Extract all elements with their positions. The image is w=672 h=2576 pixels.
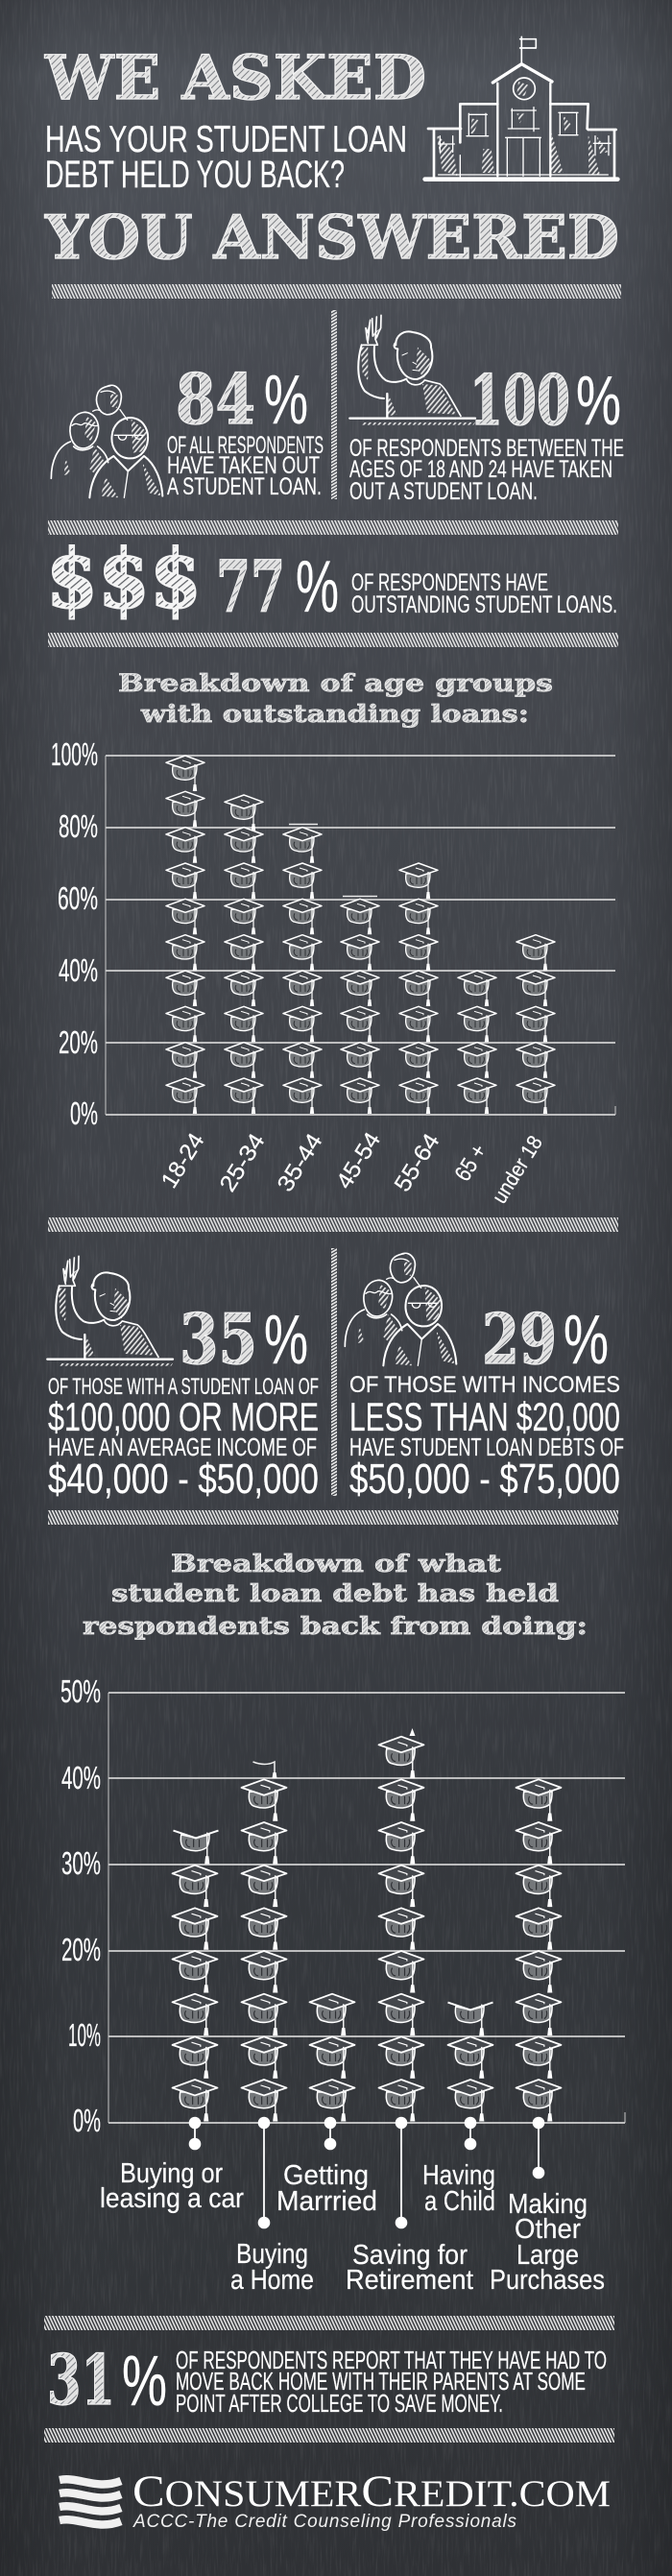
text: ages 18 to 24: OUT A STUDENT LOAN. — [349, 478, 538, 505]
panel: 84 percent — [51, 358, 324, 500]
heading: age groups: with outstanding loans: — [140, 700, 529, 728]
column: 35-44 — [283, 824, 322, 1114]
y axis labels: 20% — [61, 1932, 101, 1967]
stat: 100%: 100 — [469, 359, 570, 441]
text: loan and income: OF THOSE WITH A STUDENT LOAN OF — [48, 1374, 319, 1400]
category labels: Saving for — [352, 2240, 468, 2271]
wordmark: CONSUMER CREDIT.COM — [132, 2467, 611, 2516]
title: you answered: YOU ANSWERED — [44, 202, 619, 273]
text: outstanding loans — [351, 569, 617, 618]
x axis labels — [156, 1128, 547, 1208]
x axis labels: 45-54 — [331, 1128, 386, 1193]
x axis labels: 55-64 — [390, 1129, 445, 1196]
tagline: ACCC-The Credit Counseling Professionals — [132, 2512, 516, 2532]
subtitle question — [45, 119, 407, 196]
column: under 18 — [516, 935, 555, 1114]
text: loan and income: HAVE AN AVERAGE INCOME OF — [48, 1432, 317, 1461]
chart: what debt held respondents back from — [60, 1673, 625, 2296]
column: having a child — [447, 2003, 493, 2121]
heading: age groups — [118, 669, 553, 728]
text: all respondents: HAVE TAKEN OUT — [167, 452, 320, 479]
column: buying a home — [242, 1762, 286, 2121]
text: loan and income: $40,000 - $50,000 — [48, 1456, 319, 1503]
icon: school building — [425, 36, 617, 180]
stat: 77%: 77 — [216, 546, 285, 629]
category labels: Large — [516, 2240, 579, 2271]
stat: 31%: 31 — [47, 2339, 115, 2420]
icon: waves — [60, 2479, 121, 2525]
stat: 31%: % — [122, 2341, 167, 2420]
category labels: Making — [508, 2189, 588, 2220]
y axis labels: 40% — [61, 1760, 101, 1795]
stat: 84%: 84 — [176, 358, 255, 440]
text: outstanding loans: OF RESPONDENTS HAVE — [351, 569, 548, 596]
stat: 100%: % — [576, 363, 621, 440]
text: all respondents: OF ALL RESPONDENTS — [167, 432, 324, 459]
y axis labels: 100% — [51, 736, 98, 772]
x axis labels: 25-34 — [215, 1129, 271, 1196]
y axis labels: 40% — [59, 952, 98, 988]
category labels: Buying — [236, 2239, 308, 2270]
category labels: Having — [422, 2160, 495, 2191]
stat: 29%: % — [564, 1302, 609, 1379]
y axis labels: 60% — [58, 880, 98, 916]
column: 65+ — [458, 971, 496, 1114]
icon: dollar signs: $$$ — [46, 531, 202, 626]
y axis labels: 10% — [68, 2017, 101, 2053]
heading: what debt has held back: Breakdown of what — [171, 1550, 502, 1577]
logo: consumercredit.com — [60, 2467, 611, 2532]
x axis labels: 18-24 — [156, 1129, 210, 1192]
icon: group of people — [51, 385, 162, 497]
category labels: Marrried — [276, 2186, 377, 2217]
icon: student raising hand — [47, 1256, 173, 1366]
text: loan and income — [48, 1374, 319, 1503]
column: 55-64 — [399, 863, 438, 1114]
y axis labels: 20% — [59, 1024, 98, 1060]
icon: student raising hand — [349, 315, 475, 425]
y axis labels — [60, 1673, 101, 2138]
category labels: a Child — [424, 2186, 495, 2217]
category labels: Purchases — [490, 2265, 605, 2296]
panel: 35 percent — [47, 1256, 319, 1503]
x axis labels: 35-44 — [273, 1129, 328, 1196]
column: 45-54 — [341, 897, 379, 1114]
category labels: leasing a car — [100, 2183, 244, 2214]
title: we asked: WE ASKED — [44, 42, 426, 114]
icon: group of people — [345, 1253, 456, 1365]
heading: what debt has held back — [83, 1550, 588, 1640]
heading: what debt has held back: student loan debt has held — [111, 1579, 559, 1607]
text: moving back home — [176, 2346, 607, 2418]
heading: age groups: Breakdown of age groups — [118, 669, 553, 697]
column: 18-24 — [166, 756, 204, 1114]
text: moving back home: POINT AFTER COLLEGE TO SAVE MONEY. — [176, 2389, 503, 2418]
subtitle question: HAS YOUR STUDENT LOAN — [45, 119, 407, 160]
text: income and debts: OF THOSE WITH INCOMES — [349, 1372, 620, 1398]
y axis labels: 50% — [60, 1673, 101, 1709]
text: ages 18 to 24 — [349, 435, 624, 505]
column: 25-34 — [225, 795, 263, 1114]
category labels: Other — [515, 2214, 581, 2245]
x axis labels: 65 + — [450, 1140, 492, 1186]
y axis labels: 0% — [70, 1095, 98, 1131]
chart: age groups with outstanding loans — [51, 736, 615, 1208]
x axis labels: under 18 — [487, 1131, 547, 1208]
panel: 29 percent — [345, 1253, 624, 1503]
category labels: Getting — [283, 2160, 369, 2191]
category labels: Buying or — [120, 2158, 223, 2189]
y axis labels: 80% — [59, 808, 98, 844]
heading: what debt has held back: respondents back from doing: — [83, 1612, 588, 1640]
column: buying or leasing a car — [173, 1831, 219, 2121]
connector pins — [189, 2117, 544, 2228]
stat: 77%: % — [296, 546, 339, 628]
stat: 84%: % — [264, 362, 308, 439]
panel: 77 percent — [46, 531, 617, 629]
text: loan and income: $100,000 OR MORE — [48, 1394, 319, 1439]
y axis labels: 30% — [61, 1845, 101, 1881]
category labels: Retirement — [346, 2265, 473, 2296]
column: getting married — [309, 1994, 355, 2121]
column: making other large purchases — [516, 1779, 561, 2121]
stat: 35%: 35 — [180, 1298, 257, 1380]
y axis labels: 0% — [73, 2103, 101, 2138]
stat: 35%: % — [264, 1302, 308, 1379]
category labels — [100, 2158, 605, 2296]
subtitle question: DEBT HELD YOU BACK? — [45, 154, 345, 196]
category labels: a Home — [230, 2265, 314, 2296]
y axis labels — [51, 736, 98, 1131]
stat: 29%: 29 — [482, 1298, 557, 1380]
panel: 31 percent — [47, 2339, 607, 2420]
text: all respondents — [167, 432, 324, 500]
text: all respondents: A STUDENT LOAN. — [167, 473, 322, 500]
column: saving for retirement — [378, 1728, 424, 2121]
text: income and debts — [349, 1372, 624, 1503]
panel: 100 percent — [349, 315, 624, 505]
